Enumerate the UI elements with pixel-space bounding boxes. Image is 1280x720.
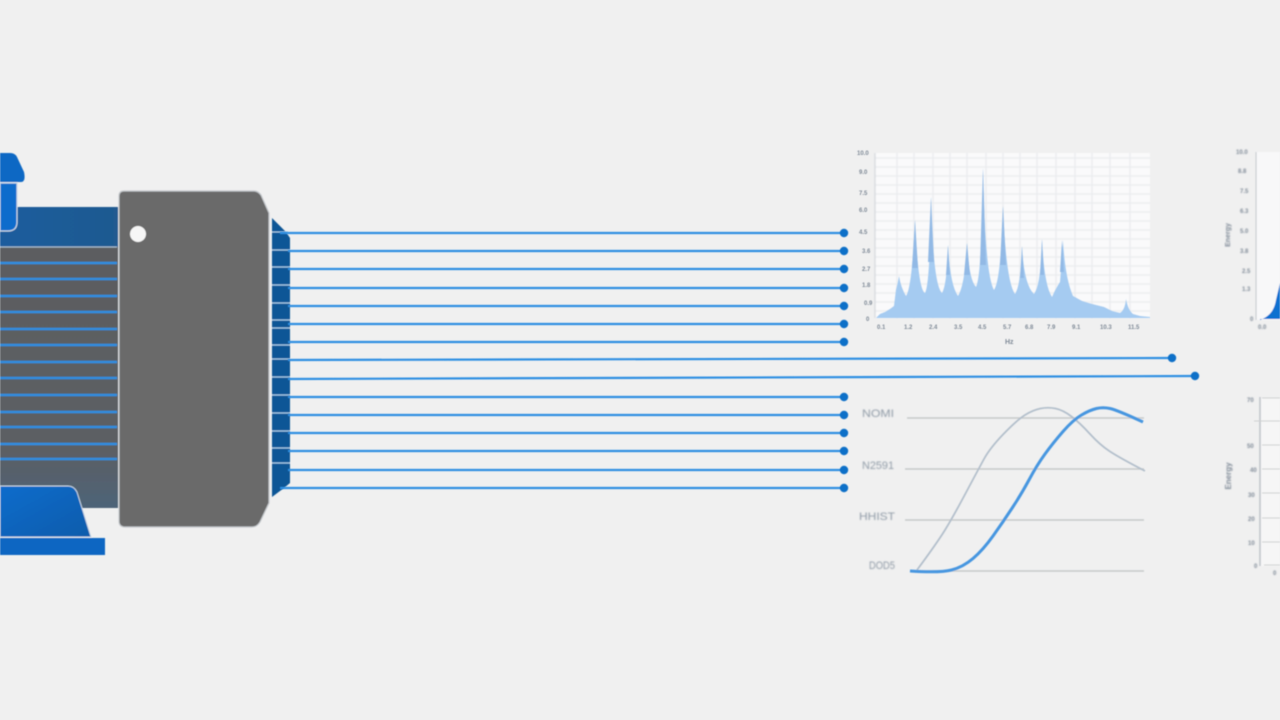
tick labels	[1247, 398, 1277, 577]
tick labels: 5.0	[1240, 229, 1249, 235]
right lower chart, cropped	[1224, 397, 1280, 577]
axis labels: 5.7	[1003, 325, 1012, 331]
tick labels: 0	[1254, 564, 1258, 570]
tick labels: 20	[1248, 517, 1255, 523]
spectrum peaks	[876, 168, 1150, 318]
tick labels: 30	[1248, 493, 1255, 499]
tick labels: 3.8	[1240, 249, 1249, 255]
row labels: DOD5	[869, 560, 895, 572]
response curve chart	[859, 408, 1145, 572]
tick labels: 0	[1250, 317, 1254, 323]
indicator light	[130, 226, 146, 242]
tick labels: 0.0	[1258, 325, 1267, 331]
gridlines	[905, 418, 1144, 571]
motor housing body	[0, 207, 118, 508]
signal wires	[280, 229, 1199, 492]
axis labels: 3.5	[954, 325, 963, 331]
blue area	[1260, 283, 1280, 320]
row labels: N2591	[862, 460, 894, 472]
row labels	[859, 408, 895, 572]
spectrum area chart	[857, 151, 1150, 346]
tick labels: 7.5	[1240, 189, 1249, 195]
tick labels: 0	[1273, 571, 1277, 577]
gray controller panel	[119, 191, 269, 527]
axis labels: 10.0	[857, 151, 869, 157]
tick labels	[1236, 150, 1267, 331]
cooling fins	[0, 263, 117, 459]
tick labels: 50	[1247, 444, 1254, 450]
axis labels: 7.9	[1047, 325, 1056, 331]
axis labels: 9.1	[1072, 325, 1081, 331]
tick labels: 70	[1247, 398, 1254, 404]
axis labels: 11.5	[1128, 325, 1140, 331]
tick labels: 6.3	[1240, 209, 1249, 215]
tick labels: 40	[1250, 468, 1257, 474]
tick labels: 8.8	[1238, 169, 1247, 175]
tick labels: 10	[1248, 541, 1255, 547]
tick labels: 2.5	[1242, 269, 1251, 275]
axis labels: Hz	[1005, 339, 1014, 346]
y axis title: Energy	[1224, 462, 1233, 490]
axis labels: 7.5	[859, 191, 868, 197]
axis labels	[857, 151, 1140, 346]
axis labels: 3.6	[862, 249, 871, 255]
right spectrum chart, cropped	[1225, 150, 1280, 331]
tick labels: 1.3	[1242, 287, 1251, 293]
mounting foot	[0, 486, 105, 555]
axis labels: 6.0	[859, 208, 868, 214]
reference curve	[917, 408, 1145, 570]
y axis	[1256, 152, 1280, 320]
axis labels: 2.4	[929, 325, 938, 331]
measured curve	[910, 408, 1143, 572]
axis labels: 10.3	[1100, 325, 1112, 331]
tick labels: 10.0	[1236, 150, 1248, 156]
axis labels: 1.8	[862, 283, 871, 289]
axis labels: 0.9	[864, 301, 873, 307]
axis labels: 9.0	[859, 170, 868, 176]
axis labels: 1.2	[904, 325, 913, 331]
row labels: HHIST	[859, 511, 895, 523]
y axis title: Energy	[1225, 223, 1232, 247]
axis labels: 0	[866, 317, 870, 323]
axis labels: 4.5	[978, 325, 987, 331]
axis labels: 4.5	[859, 230, 868, 236]
axis labels: 0.1	[877, 325, 886, 331]
axis and gridlines	[1254, 397, 1280, 566]
connector block	[272, 218, 290, 497]
axis labels: 2.7	[862, 267, 871, 273]
chart grid	[875, 153, 1150, 318]
axis labels: 6.8	[1025, 325, 1034, 331]
terminal box	[0, 153, 25, 231]
row labels: NOMI	[862, 408, 894, 420]
motor assembly	[0, 153, 290, 555]
